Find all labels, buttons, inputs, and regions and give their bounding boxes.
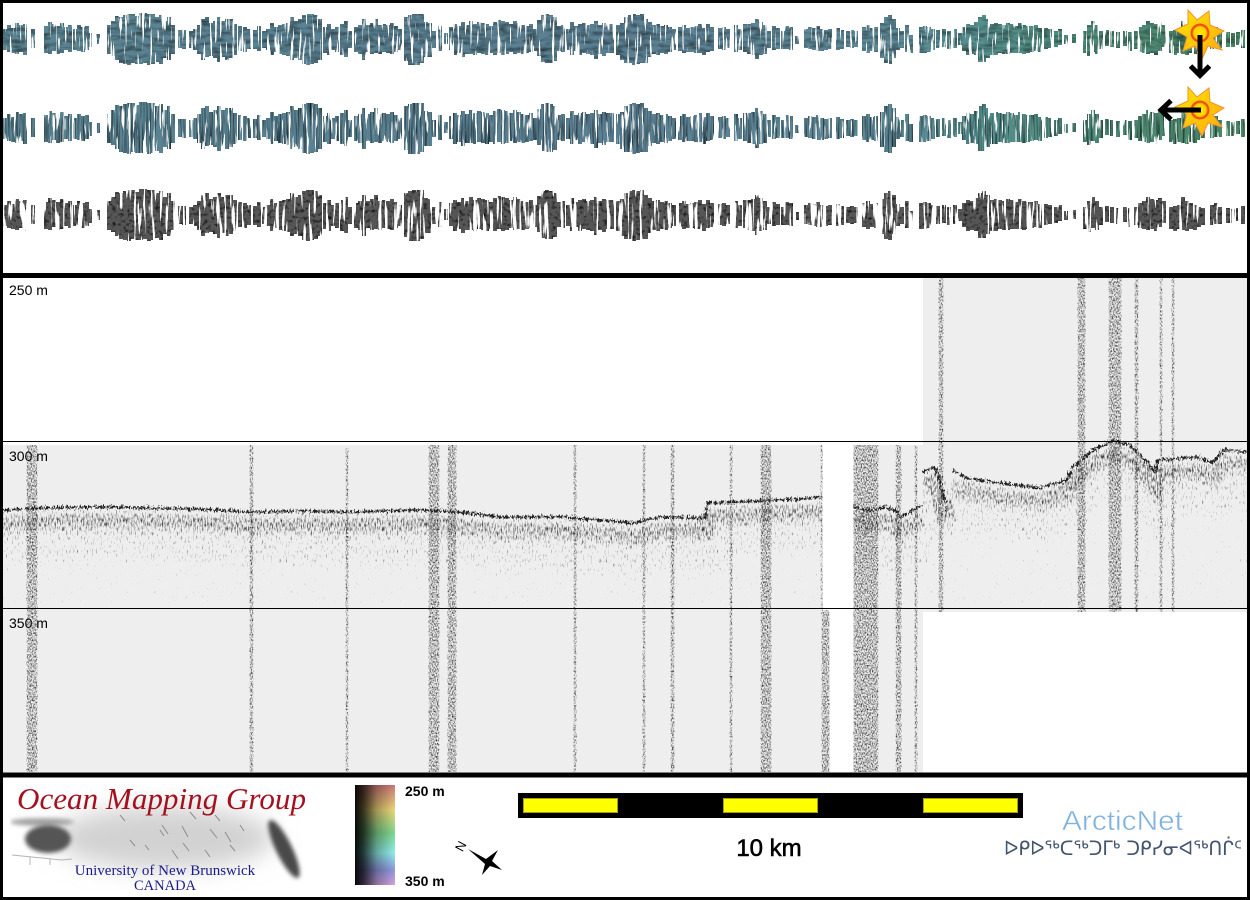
depth label 250 m: 250 m (9, 282, 48, 298)
logo: Ocean Mapping Group: Ocean Mapping Group (17, 782, 306, 816)
logo: ArcticNet: ArcticNet (1062, 805, 1183, 836)
depth gridline 300 m (0, 441, 1250, 442)
logo: Ocean Mapping Group: University of New Brunswick (75, 863, 256, 879)
colour legend: depth colour bar (355, 785, 395, 885)
strip: backscatter greyscale (5, 189, 1243, 241)
sub-floor scatter speckle (3, 441, 1247, 608)
icon: north arrow compass (452, 839, 502, 875)
panel: footer legend (10, 782, 1242, 894)
logo: Ocean Mapping Group: CANADA (134, 878, 197, 894)
logo: Ocean Mapping Group (10, 782, 306, 894)
legend label 350 m: 350 m (405, 873, 445, 889)
icon: sun east illumination (1175, 87, 1224, 136)
vertical noise bands (26, 278, 1175, 772)
seafloor return line (3, 441, 1247, 523)
depth gridline 350 m (0, 608, 1250, 609)
panel: sub-bottom echogram profile (0, 278, 1250, 772)
logo: ArcticNet (1004, 805, 1242, 860)
scale bar (518, 793, 1023, 818)
scale label: 10 km (736, 835, 802, 862)
arrow: light direction left (1161, 100, 1201, 120)
icon: sun north illumination (1175, 10, 1224, 59)
strip: sun-illuminated from north (5, 13, 1243, 65)
strip: sun-illuminated from east (5, 102, 1243, 154)
depth label 350 m: 350 m (9, 615, 48, 631)
arrow: light direction down (1190, 35, 1210, 76)
depth label 300 m: 300 m (9, 448, 48, 464)
legend label 250 m: 250 m (405, 783, 445, 799)
icon: north arrow compass: N (452, 839, 470, 854)
panel: plan-view survey strips (3, 3, 1247, 273)
